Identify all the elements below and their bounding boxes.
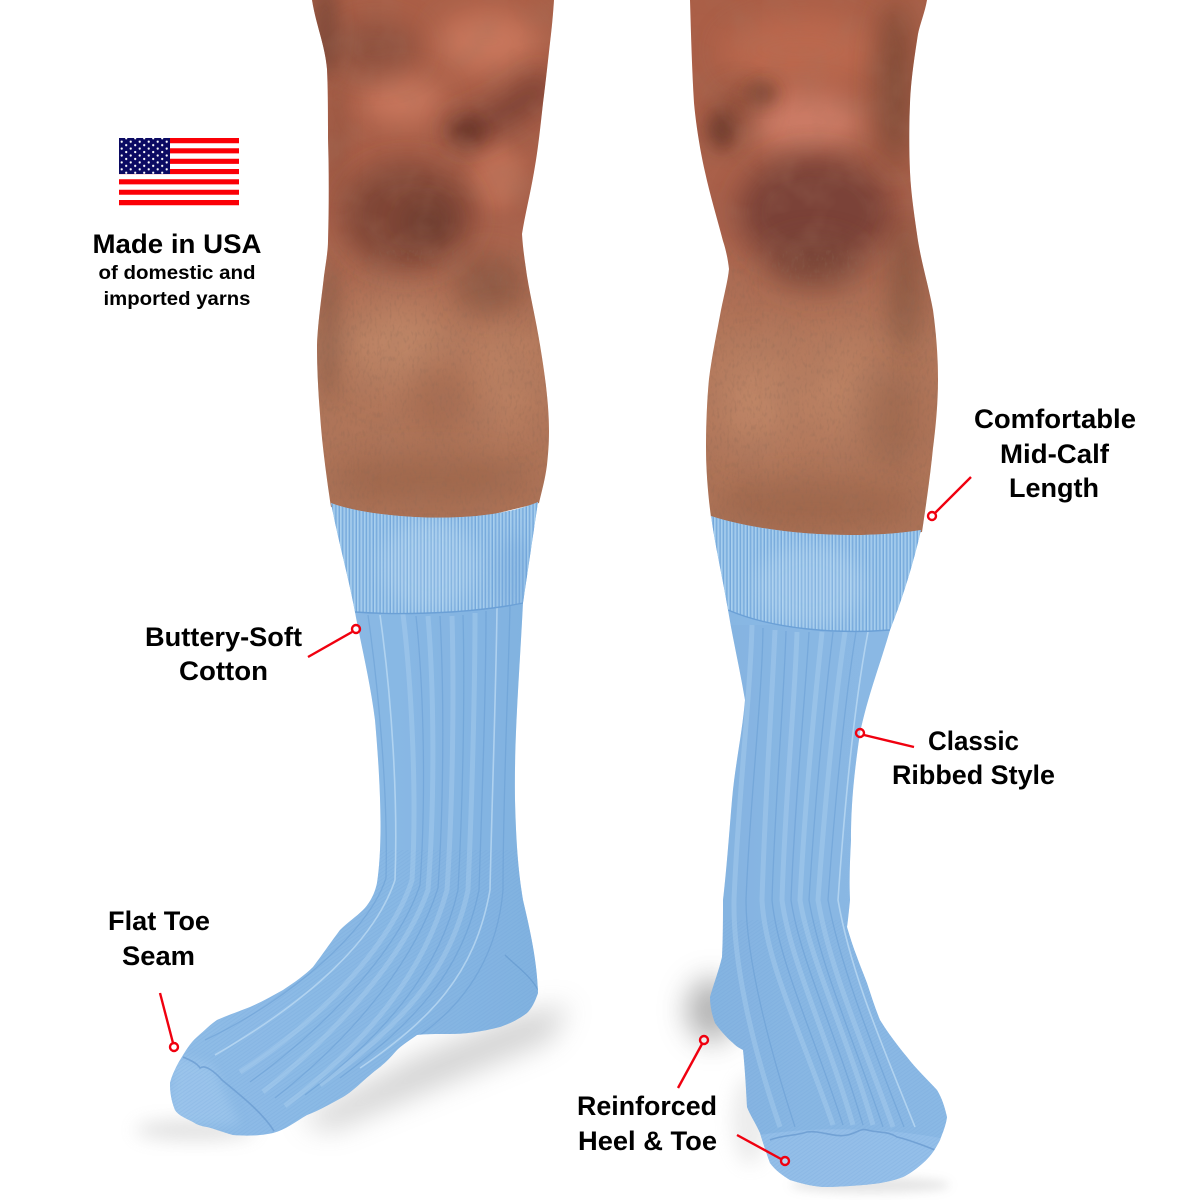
callout: Classic Ribbed Style: Classic [928,726,1019,756]
left toe seam [183,1057,274,1131]
callout: Buttery-Soft Cotton [145,622,360,686]
right sock ribs [734,625,915,1127]
right sock [700,505,955,1195]
left leg [312,0,554,518]
text block: Made in USA: of domestic and [98,263,256,284]
right sock cuff [711,516,921,631]
callout: Comfortable Mid-Calf Length: Comfortable [974,404,1136,434]
left sock cuff [331,502,538,613]
left sock ribs [205,606,510,1106]
callout: Reinforced Heel & Toe: Heel & Toe [578,1126,717,1156]
left sock [160,495,550,1145]
right leg [685,0,945,548]
callout: Flat Toe Seam: Flat Toe [108,906,210,936]
callout: Reinforced Heel & Toe [577,1036,789,1165]
callout: Flat Toe Seam: Seam [122,941,195,971]
callout: Comfortable Mid-Calf Length [928,404,1136,520]
right toe seam [770,1130,935,1150]
callout: Comfortable Mid-Calf Length: Length [1009,473,1099,503]
callout: Buttery-Soft Cotton: Buttery-Soft [145,622,302,652]
icon: American flag [119,138,239,205]
callout: Classic Ribbed Style: Ribbed Style [892,760,1055,790]
text block: Made in USA: imported yarns [104,289,250,310]
text block: Made in USA [92,229,262,310]
right cuff seam [728,610,890,631]
text block: Made in USA: Made in USA [92,229,262,259]
callout: Classic Ribbed Style [856,726,1055,790]
left cuff seam [355,603,523,614]
callout: Buttery-Soft Cotton: Cotton [179,656,268,686]
callout: Comfortable Mid-Calf Length: Mid-Calf [1000,439,1110,469]
left sock heel seam [505,955,538,990]
callout: Flat Toe Seam [108,906,210,1051]
floor shadows beneath feet [135,978,950,1193]
callout: Reinforced Heel & Toe: Reinforced [577,1091,717,1121]
